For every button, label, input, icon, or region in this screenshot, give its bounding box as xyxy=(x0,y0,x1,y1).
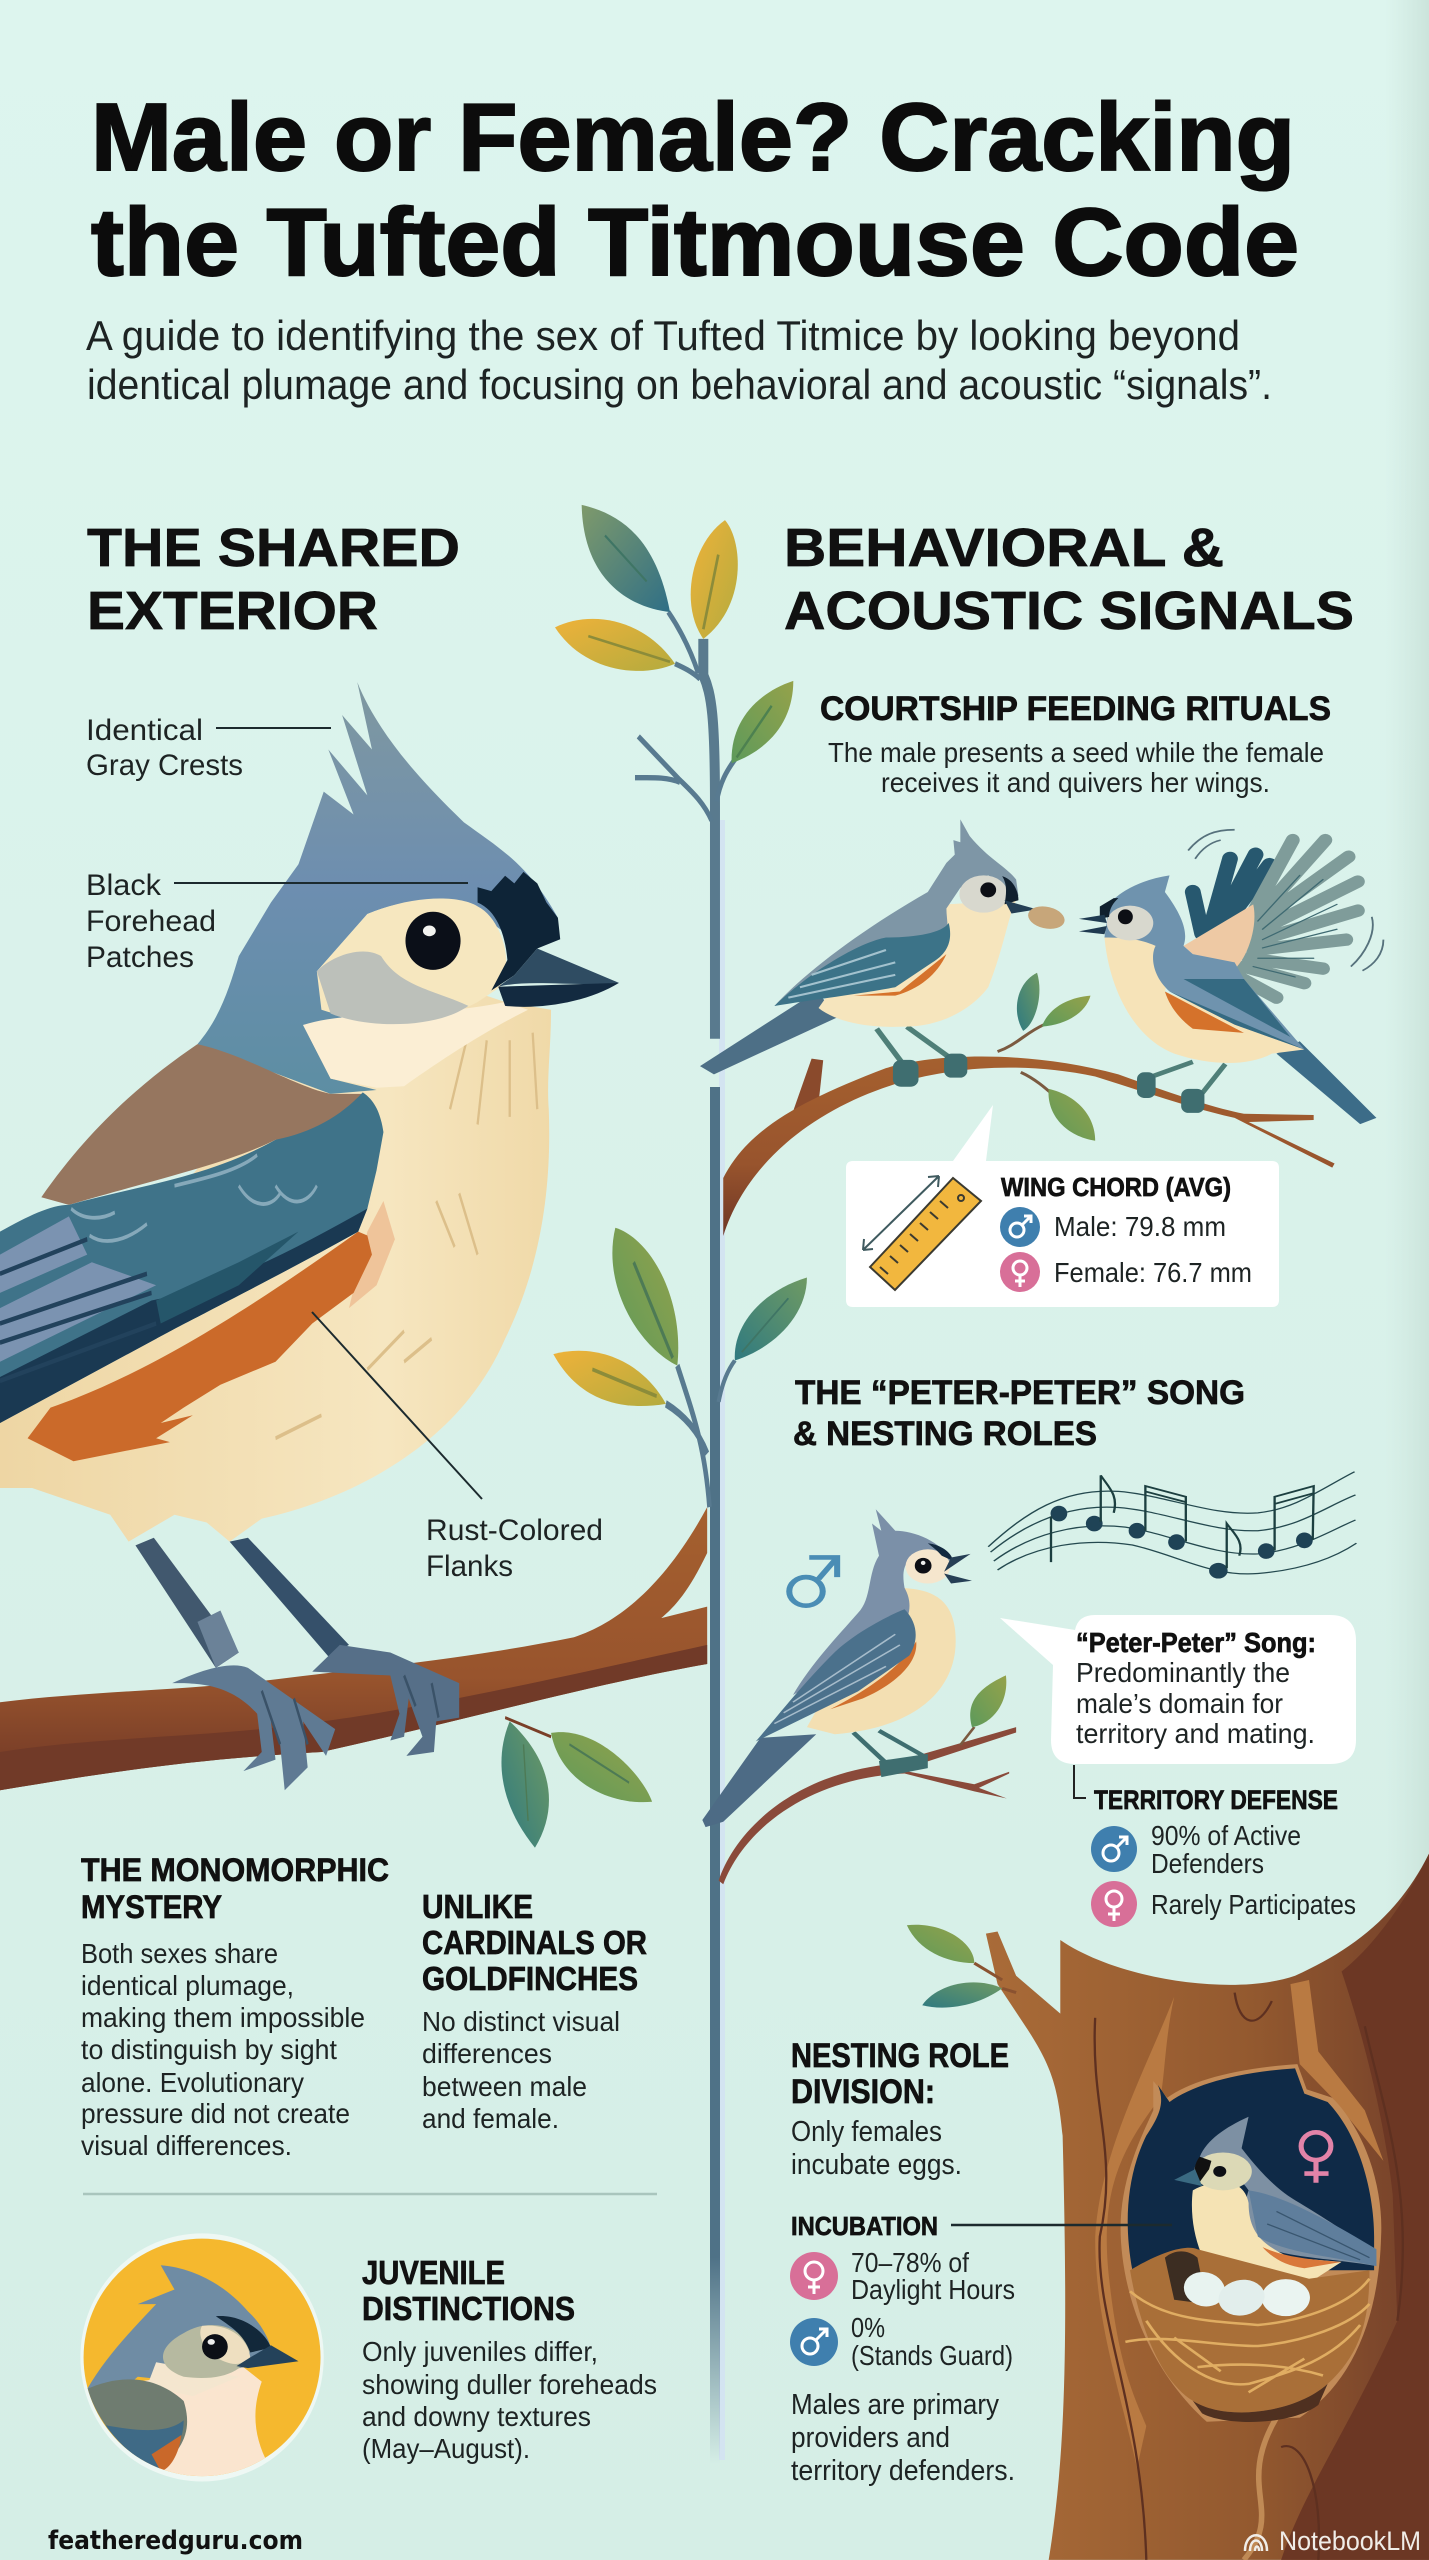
nesting role text: DIVISION: xyxy=(791,2073,935,2111)
label: identical gray crests: Identical xyxy=(86,714,203,747)
icon: male xyxy=(1091,1826,1137,1872)
territory defense block: TERRITORY DEFENSE xyxy=(1094,1785,1338,1815)
wing chord callout: WING CHORD (AVG) xyxy=(1001,1172,1231,1202)
courtship heading and text: receives it and quivers her wings. xyxy=(881,767,1270,798)
text block: unlike cardinals: differences xyxy=(422,2038,552,2069)
nesting role text: Only females xyxy=(791,2116,942,2148)
territory defense block xyxy=(1074,1765,1356,1927)
text block: monomorphic mystery: Both sexes share xyxy=(81,1938,278,1969)
icon: male symbol xyxy=(789,1557,837,1606)
subtitle: A guide to identifying the sex of Tufted Titmice by looking beyond xyxy=(86,312,1240,359)
incubation stats: 0% xyxy=(851,2312,885,2343)
text block: unlike cardinals xyxy=(422,1888,647,2134)
territory defense block: Defenders xyxy=(1151,1848,1264,1879)
icon: female xyxy=(1091,1881,1137,1927)
text block: monomorphic mystery: MYSTERY xyxy=(81,1889,222,1925)
label: rust colored flanks xyxy=(312,1312,603,1583)
heading: behavioral and acoustic signals: BEHAVIORAL & xyxy=(784,518,1224,578)
black forehead patch xyxy=(478,872,560,991)
territory defense block: 90% of Active xyxy=(1151,1820,1301,1851)
text block: juvenile distinctions: DISTINCTIONS xyxy=(362,2290,575,2327)
text block: monomorphic mystery: visual differences. xyxy=(81,2130,292,2161)
nesting role text: incubate eggs. xyxy=(791,2149,962,2181)
text block: unlike cardinals: and female. xyxy=(422,2103,559,2134)
label: rust colored flanks: Rust-Colored xyxy=(426,1514,603,1547)
icon: male xyxy=(1000,1207,1040,1247)
brown mantle xyxy=(41,1044,363,1205)
rust flank xyxy=(28,1232,372,1461)
males text: territory defenders. xyxy=(791,2455,1015,2487)
speech bubble: peter-peter song: male’s domain for xyxy=(1076,1688,1283,1719)
branch xyxy=(0,1507,707,1790)
callout card xyxy=(846,1105,1279,1307)
males text: providers and xyxy=(791,2422,950,2454)
top leaf sprig xyxy=(555,505,793,1039)
callout lines and labels xyxy=(86,714,603,1583)
nesting role text xyxy=(791,2037,1009,2181)
text block: monomorphic mystery xyxy=(81,1852,389,2161)
title: Male or Female? Cracking xyxy=(91,84,1295,191)
cheek xyxy=(317,899,506,1020)
text block: juvenile distinctions: showing duller foreheads xyxy=(362,2369,657,2400)
text block: unlike cardinals: No distinct visual xyxy=(422,2006,620,2037)
small leaves under branch xyxy=(501,1718,652,1848)
nesting bird xyxy=(1174,2117,1376,2287)
speech bubble: peter-peter song xyxy=(1000,1615,1356,1764)
beak xyxy=(498,948,619,1007)
juvenile bird portrait xyxy=(80,2233,324,2488)
label: black forehead patches: Patches xyxy=(86,941,194,974)
title xyxy=(91,84,1299,296)
bubble shape xyxy=(1000,1615,1356,1764)
males text xyxy=(791,2389,1015,2487)
heading: behavioral and acoustic signals: ACOUSTIC SIGNALS xyxy=(784,581,1354,641)
speech bubble: peter-peter song: “Peter-Peter” Song: xyxy=(1076,1627,1316,1658)
song heading xyxy=(793,1374,1245,1453)
singing bird illustration xyxy=(702,1472,1356,1884)
courtship heading and text: The male presents a seed while the female xyxy=(828,737,1324,768)
heading: the shared exterior: THE SHARED xyxy=(87,518,460,578)
title: the Tufted Titmouse Code xyxy=(91,189,1299,296)
tree trunk with nest xyxy=(907,1854,1429,2560)
icon: male xyxy=(790,2318,838,2366)
icon: ruler xyxy=(863,1176,981,1290)
nest with eggs xyxy=(1125,2248,1369,2422)
males text: Males are primary xyxy=(791,2389,999,2421)
text block: unlike cardinals: UNLIKE xyxy=(422,1888,533,1925)
heading: the shared exterior: EXTERIOR xyxy=(87,581,378,641)
heading: behavioral and acoustic signals xyxy=(784,518,1354,641)
incubation stats: (Stands Guard) xyxy=(851,2340,1013,2371)
label: rust colored flanks: Flanks xyxy=(426,1550,513,1583)
side branch leaves xyxy=(907,1925,1016,2008)
heading: the shared exterior xyxy=(87,518,460,641)
text block: juvenile distinctions: Only juveniles differ, xyxy=(362,2336,598,2367)
incubation stats: Daylight Hours xyxy=(851,2274,1015,2305)
icon: female symbol xyxy=(1301,2132,1331,2183)
male bird with seed xyxy=(700,819,1067,1087)
text block: monomorphic mystery: pressure did not create xyxy=(81,2098,350,2129)
singing branch xyxy=(719,1727,1016,1884)
right mid leaf xyxy=(719,1278,807,1402)
text block: juvenile distinctions xyxy=(362,2254,657,2464)
middle leaf sprig xyxy=(553,1228,709,1507)
subtitle xyxy=(86,312,1272,408)
tree hole xyxy=(1121,2064,1381,2422)
subtitle: identical plumage and focusing on behavioral and acoustic “signals”. xyxy=(87,361,1272,408)
eye xyxy=(405,912,461,970)
text block: monomorphic mystery: THE MONOMORPHIC xyxy=(81,1852,389,1888)
feet xyxy=(172,1645,459,1790)
incubation stats: INCUBATION xyxy=(791,2211,938,2241)
label: black forehead patches: Black xyxy=(86,869,162,902)
label: black forehead patches: Forehead xyxy=(86,905,216,938)
text block: monomorphic mystery: making them impossible xyxy=(81,2002,365,2033)
branch leaf xyxy=(960,1675,1006,1745)
central stem xyxy=(710,820,725,2464)
label: identical gray crests: Gray Crests xyxy=(86,749,243,782)
large titmouse on branch xyxy=(0,682,707,1848)
courtship heading and text: COURTSHIP FEEDING RITUALS xyxy=(820,690,1331,728)
breast feather texture xyxy=(276,1033,537,1438)
song heading: & NESTING ROLES xyxy=(793,1415,1097,1453)
speech bubble: peter-peter song: Predominantly the xyxy=(1076,1657,1290,1688)
text block: unlike cardinals: GOLDFINCHES xyxy=(422,1960,638,1997)
speech bubble: peter-peter song: territory and mating. xyxy=(1076,1718,1315,1749)
female bird with quivering wing xyxy=(1079,830,1383,1124)
text block: juvenile distinctions: and downy textures xyxy=(362,2401,591,2432)
head and crest xyxy=(197,682,558,1094)
peach flank blush xyxy=(349,1201,395,1308)
text block: monomorphic mystery: to distinguish by sight xyxy=(81,2034,337,2065)
icon: female xyxy=(1000,1252,1040,1292)
singing bird xyxy=(702,1509,972,1827)
music notes xyxy=(988,1472,1356,1579)
territory defense block: Rarely Participates xyxy=(1151,1889,1356,1920)
song heading: THE “PETER-PETER” SONG xyxy=(795,1374,1245,1412)
text block: juvenile distinctions: JUVENILE xyxy=(362,2254,505,2291)
nesting role text: NESTING ROLE xyxy=(791,2037,1009,2075)
text block: monomorphic mystery: identical plumage, xyxy=(81,1970,294,2001)
label: identical gray crests xyxy=(86,714,331,782)
text block: unlike cardinals: between male xyxy=(422,2071,587,2102)
legs xyxy=(135,1538,349,1668)
courtship illustration xyxy=(700,819,1383,1236)
label: black forehead patches xyxy=(86,869,468,974)
notebooklm watermark: NotebookLM xyxy=(1279,2526,1421,2556)
incubation stats: 70–78% of xyxy=(851,2247,969,2278)
courtship branch xyxy=(723,973,1335,1236)
wing chord callout: Female: 76.7 mm xyxy=(1054,1257,1252,1288)
wing chord callout xyxy=(846,1105,1279,1307)
wing chord callout: Male: 79.8 mm xyxy=(1054,1211,1226,1242)
wing xyxy=(0,1092,383,1423)
throat xyxy=(303,1002,528,1088)
text block: unlike cardinals: CARDINALS OR xyxy=(422,1924,647,1961)
source url: featheredguru.com xyxy=(48,2526,303,2556)
icon: female xyxy=(790,2252,838,2300)
text block: juvenile distinctions: (May–August). xyxy=(362,2433,530,2464)
body xyxy=(0,956,551,1542)
text block: monomorphic mystery: alone. Evolutionary xyxy=(81,2067,304,2098)
incubation stats xyxy=(790,2211,1172,2371)
trunk xyxy=(986,1854,1429,2560)
courtship heading and text xyxy=(820,690,1331,798)
